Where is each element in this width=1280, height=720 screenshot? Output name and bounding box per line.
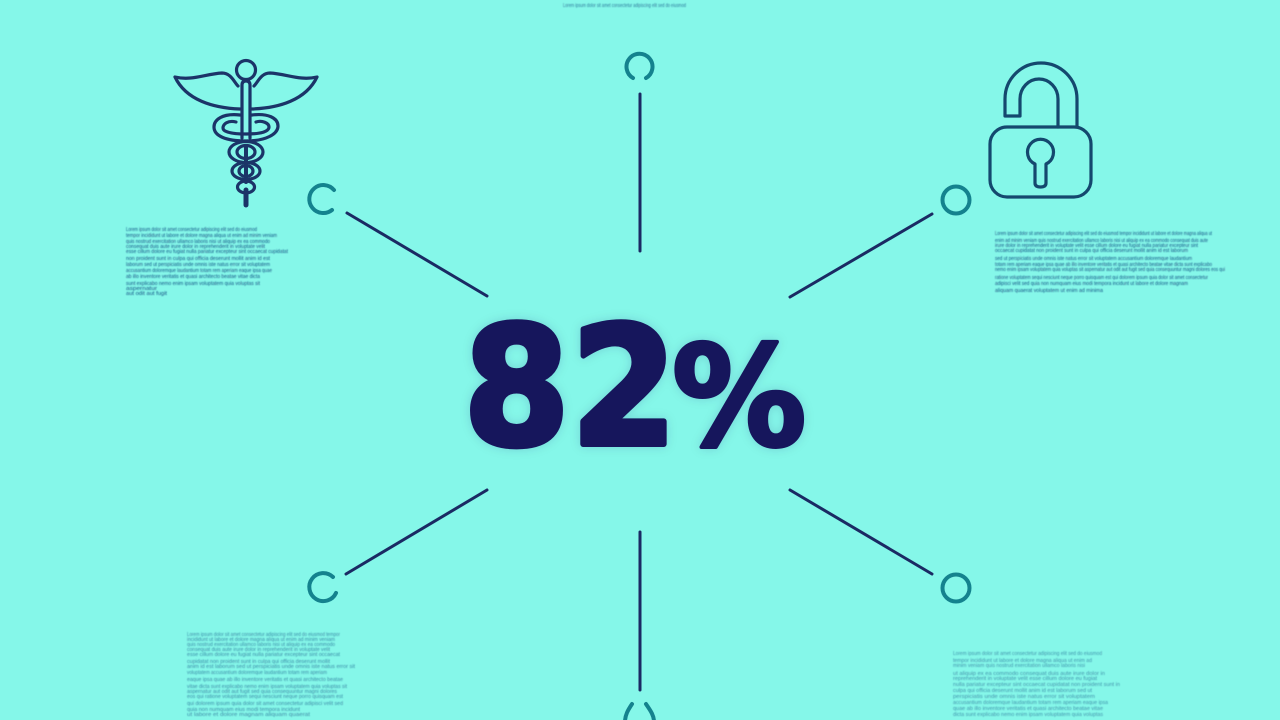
connector spokes	[346, 94, 932, 690]
central statistic: 82%: 8	[464, 293, 570, 483]
text block: upper right	[995, 231, 1225, 294]
text block: lower left: esse cillum dolore eu fugiat nulla pariatur excepteur sint occaecat	[187, 652, 340, 658]
text block: lower left: Lorem ipsum dolor sit amet consectetur adipiscing elit sed do eiusmod tempor	[187, 632, 340, 638]
node: upper right	[942, 186, 970, 214]
node: lower left, open at right	[309, 573, 336, 601]
text block: lower left: eaque ipsa quae ab illo inventore veritatis et quasi architecto beatae	[187, 677, 343, 683]
icon: caduceus	[175, 60, 317, 205]
text block: lower left: voluptatem accusantium doloremque laudantium totam rem aperiam	[187, 670, 327, 676]
text block: upper left: Lorem ipsum dolor sit amet consectetur adipiscing elit sed do eiusmod	[126, 227, 257, 233]
text block: lower right: minim veniam quis nostrud exercitation ullamco laboris nisi	[953, 663, 1085, 669]
text block: upper right: irure dolor in reprehenderit in voluptate velit esse cillum dolore eu fugiat nulla pariatur excepteur sint	[995, 243, 1198, 249]
text block: lower right: nulla pariatur excepteur sint occaecat cupidatat non proident sunt in	[953, 682, 1120, 688]
text block: lower left: ut labore et dolore magnam aliquam quaerat	[187, 712, 311, 718]
text block: lower right: dicta sunt explicabo nemo enim ipsam voluptatem quia voluptas	[953, 712, 1103, 718]
central statistic: 82%	[464, 293, 806, 483]
text block: upper right: adipisci velit sed quia non numquam eius modi tempora incidunt ut labore et dolore magnam	[995, 281, 1188, 287]
text block: lower left: cupidatat non proident sunt in culpa qui officia deserunt mollit	[187, 659, 330, 665]
text block: upper right: nemo enim ipsam voluptatem quia voluptas sit aspernatur aut odit aut fugit sed quia consequuntur magni dolores eos qui	[995, 267, 1225, 273]
text block: upper left: aut odit aut fugit	[126, 291, 168, 297]
text block: lower left: vitae dicta sunt explicabo nemo enim ipsam voluptatem quia voluptas sit	[187, 684, 347, 690]
text block: upper left: accusantium doloremque laudantium totam rem aperiam eaque ipsa quae	[126, 268, 272, 274]
text block: lower right: Lorem ipsum dolor sit amet consectetur adipiscing elit sed do eiusmod	[953, 651, 1102, 657]
text block: lower left: quia non numquam eius modi tempora incidunt	[187, 707, 300, 713]
text block: upper right: sed ut perspiciatis unde omnis iste natus error sit voluptatem accusantium doloremque laudantium	[995, 256, 1192, 262]
text block: upper left: laborum sed ut perspiciatis unde omnis iste natus error sit voluptatem	[126, 262, 270, 268]
node: lower right	[942, 574, 970, 602]
text block: lower right: accusantium doloremque laudantium totam rem aperiam eaque ipsa	[953, 700, 1108, 706]
node: upper left, open at right	[309, 185, 334, 213]
text block: upper left: sunt explicabo nemo enim ipsam voluptatem quia voluptas sit	[126, 281, 260, 287]
top caption fragment: Lorem ipsum dolor sit amet consectetur adipiscing elit sed do eiusmod	[563, 3, 686, 9]
text block: upper left: non proident sunt in culpa qui officia deserunt mollit anim id est	[126, 256, 270, 262]
text block: upper left	[126, 227, 288, 297]
node: top, open at bottom	[626, 54, 652, 78]
text block: upper left: esse cillum dolore eu fugiat nulla pariatur excepteur sint occaecat cupidatat	[126, 249, 288, 255]
text block: upper left: consequat duis aute irure dolor in reprehenderit in voluptate velit	[126, 244, 265, 250]
text block: lower right: ut aliquip ex ea commodo consequat duis aute irure dolor in	[953, 671, 1105, 677]
text block: upper left: tempor incididunt ut labore et dolore magna aliqua ut enim ad minim veniam	[126, 233, 277, 239]
text block: lower left: incididunt ut labore et dolore magna aliqua ut enim ad minim veniam	[187, 637, 335, 643]
text block: lower left: eos qui ratione voluptatem sequi nesciunt neque porro quisquam est	[187, 694, 343, 700]
text block: lower right: tempor incididunt ut labore et dolore magna aliqua ut enim ad	[953, 658, 1092, 664]
text block: upper right: enim ad minim veniam quis nostrud exercitation ullamco laboris nisi ut aliquip ex ea commodo consequat duis aute	[995, 238, 1208, 244]
text block: lower left: quis nostrud exercitation ullamco laboris nisi ut aliquip ex ea commodo	[187, 642, 335, 648]
text block: lower right: quae ab illo inventore veritatis et quasi architecto beatae vitae	[953, 706, 1103, 712]
node rings	[309, 54, 970, 720]
text block: lower left: aspernatur aut odit aut fugit sed quia consequuntur magni dolores	[187, 689, 337, 695]
text block: upper right: totam rem aperiam eaque ipsa quae ab illo inventore veritatis et quasi architecto beatae vitae dicta sunt explicabo	[995, 262, 1212, 268]
text block: upper left: ab illo inventore veritatis et quasi architecto beatae vitae dicta	[126, 274, 260, 280]
text block: upper right: occaecat cupidatat non proident sunt in culpa qui officia deserunt mollit anim id est laborum	[995, 248, 1188, 254]
text block: lower right: perspiciatis unde omnis iste natus error sit voluptatem	[953, 694, 1096, 700]
central statistic: 82%: 2	[571, 293, 677, 483]
central statistic: 82%: %	[672, 317, 806, 479]
icon: open padlock	[990, 63, 1091, 197]
text block: lower right	[953, 651, 1120, 718]
text block: lower right: culpa qui officia deserunt mollit anim id est laborum sed ut	[953, 688, 1092, 694]
text block: upper left: quis nostrud exercitation ullamco laboris nisi ut aliquip ex ea commodo	[126, 239, 270, 245]
text block: upper right: ratione voluptatem sequi nesciunt neque porro quisquam est qui dolorem ipsum quia dolor sit amet consectetur	[995, 275, 1208, 281]
text block: lower left	[187, 632, 356, 718]
text block: lower left: anim id est laborum sed ut perspiciatis unde omnis iste natus error sit	[187, 664, 356, 670]
text block: lower left: qui dolorem ipsum quia dolor sit amet consectetur adipisci velit sed	[187, 701, 343, 707]
text block: lower right: reprehenderit in voluptate velit esse cillum dolore eu fugiat	[953, 676, 1098, 682]
text block: lower left: consequat duis aute irure dolor in reprehenderit in voluptate velit	[187, 647, 330, 653]
text block: upper left: aspernatur	[126, 286, 157, 292]
node: bottom, open at top	[625, 704, 654, 720]
text block: upper right: aliquam quaerat voluptatem ut enim ad minima	[995, 288, 1103, 294]
